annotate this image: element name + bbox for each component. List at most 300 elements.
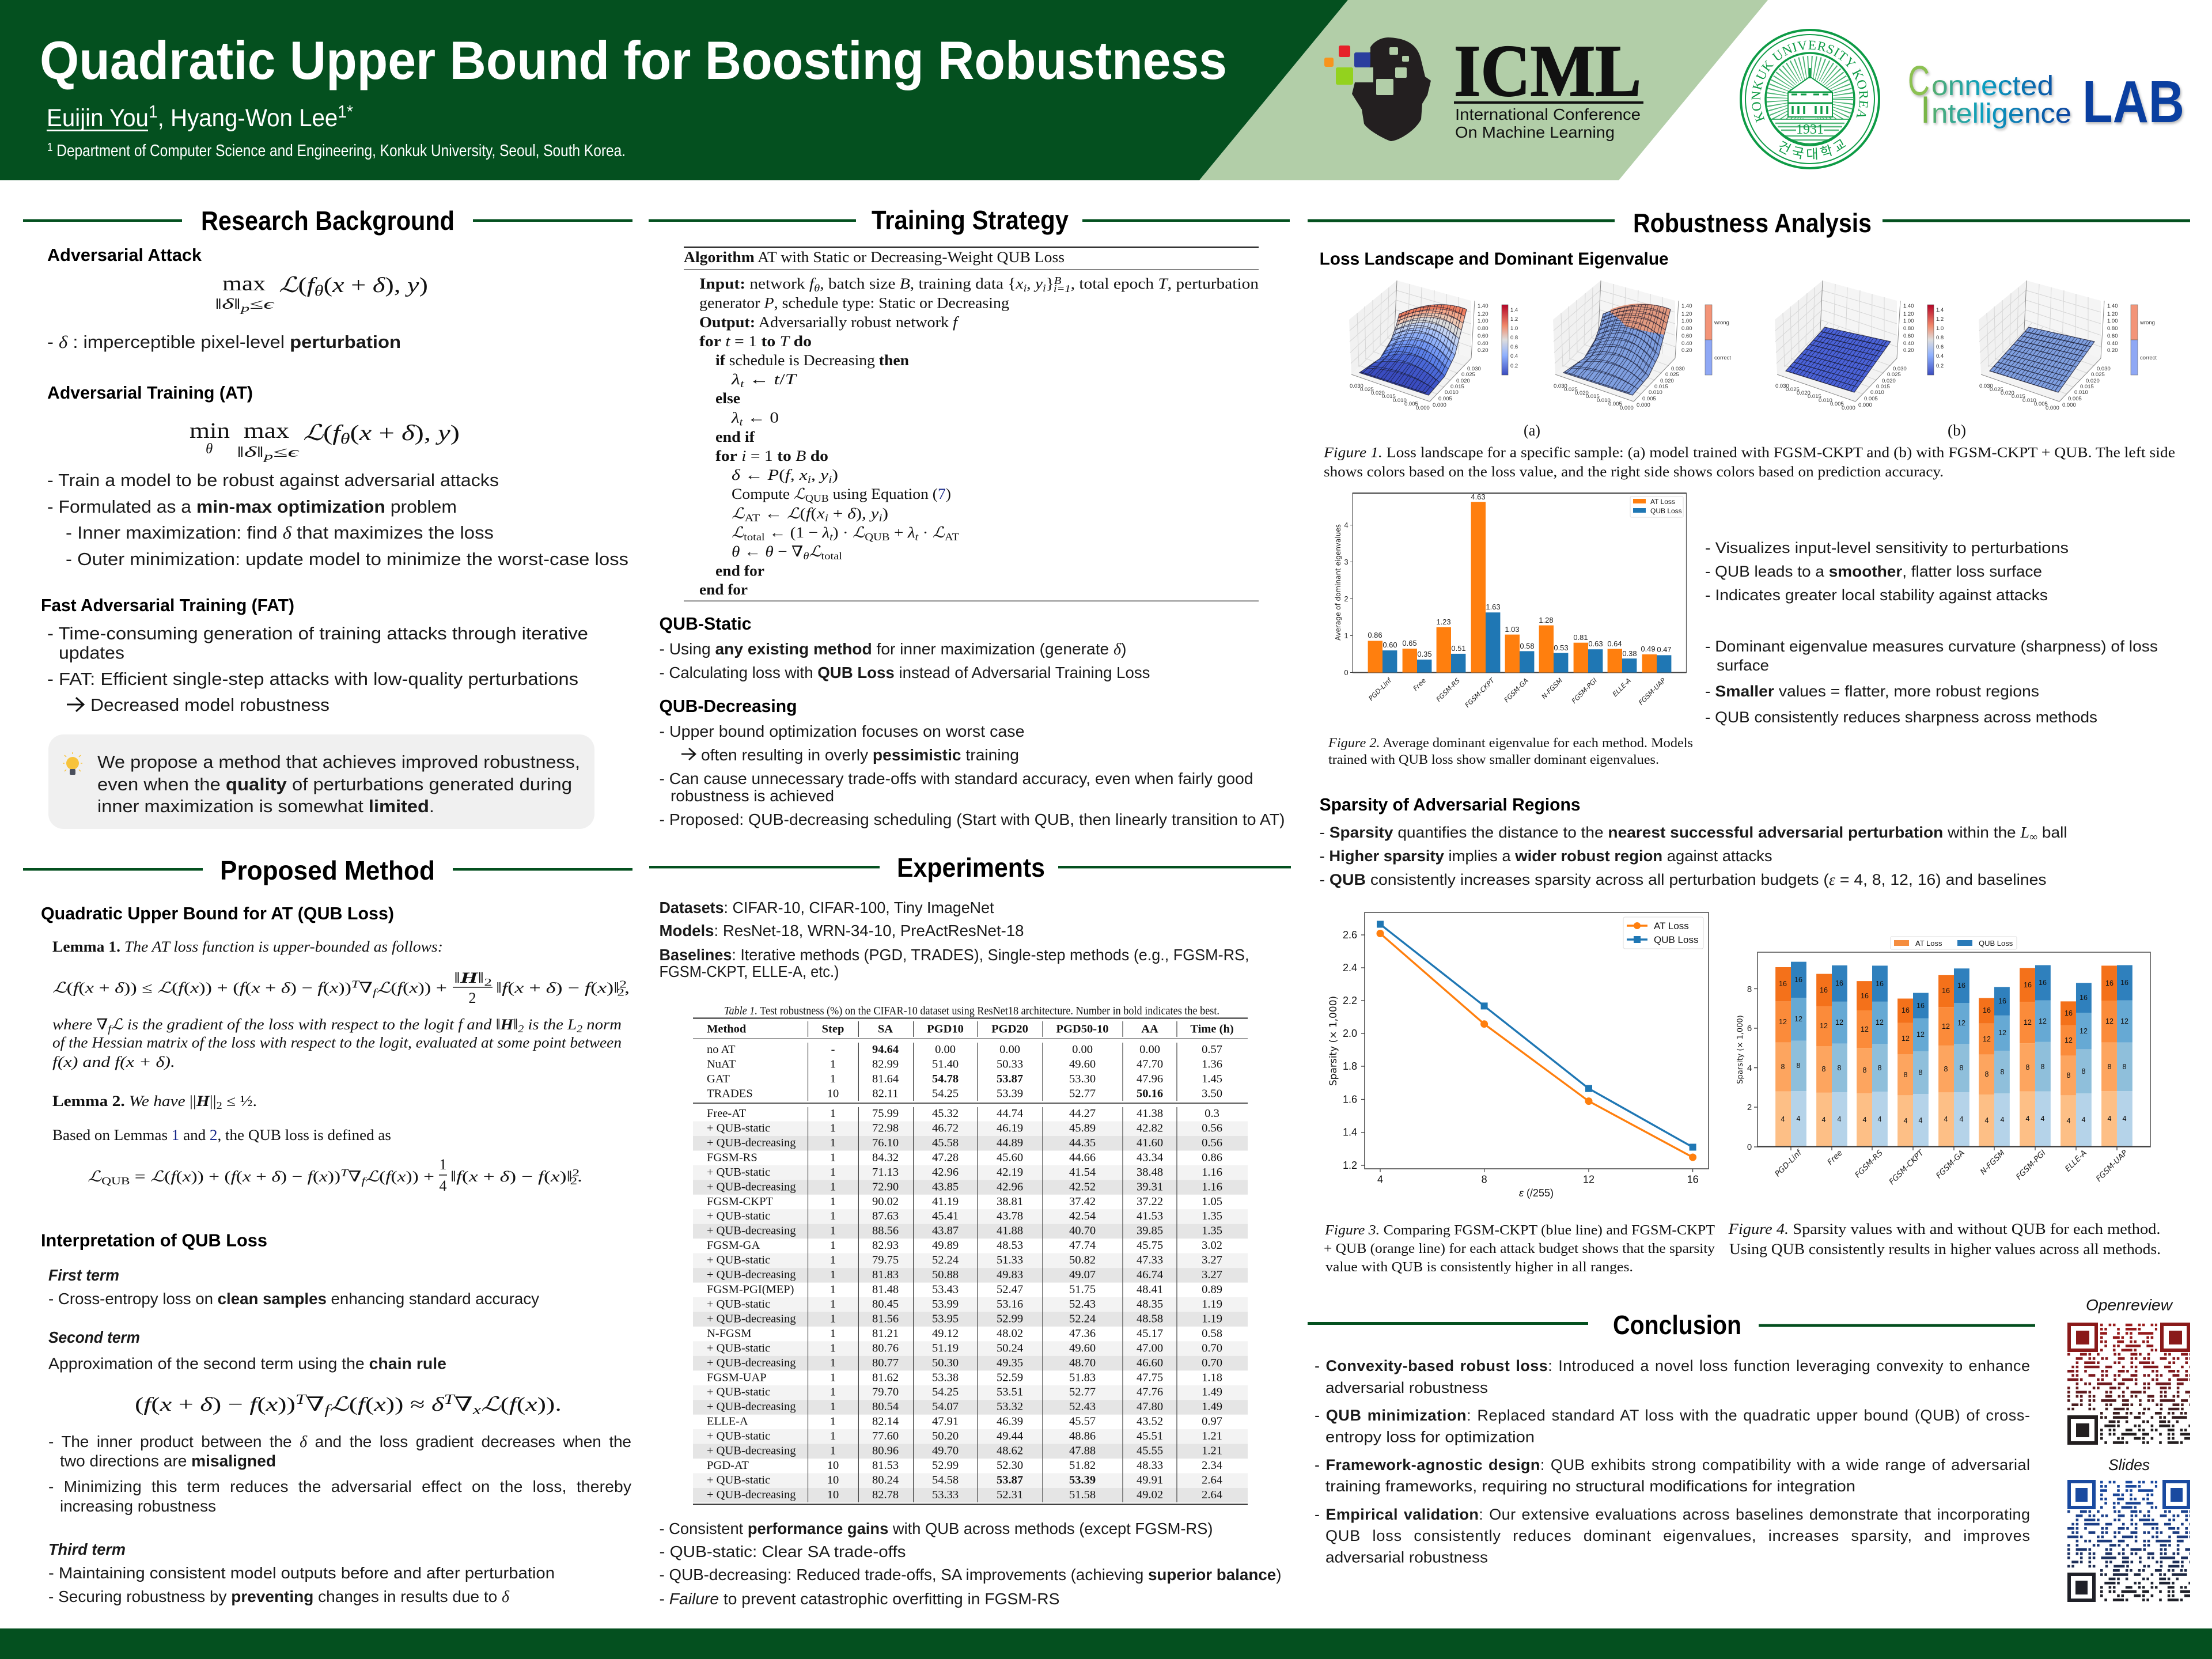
- table numeric values: [827, 1043, 1222, 1501]
- table numeric values: 42.54: [1069, 1210, 1096, 1222]
- algorithm box: ·: [918, 524, 933, 541]
- table method column: FGSM-PGI(MEP): [707, 1283, 794, 1296]
- table numeric values: 84.32: [872, 1151, 899, 1164]
- segment budget labels: 12: [1902, 1035, 1910, 1043]
- table numeric values: 0.00: [935, 1043, 956, 1056]
- table method column: + QUB-decreasing: [707, 1400, 796, 1413]
- algorithm box: }: [1046, 275, 1054, 292]
- chart: loss surface (b) coloured by loss: 0.010: [1870, 389, 1884, 396]
- chart: loss surface (b) coloured by accuracy: 0.005: [2034, 401, 2048, 407]
- table numeric values: 1: [830, 1357, 836, 1369]
- chart: loss surface (a) coloured by accuracy: 0.005: [1608, 401, 1622, 407]
- bar value labels: 0.47: [1657, 645, 1672, 654]
- algorithm box: +: [890, 524, 908, 541]
- table numeric values: 44.89: [997, 1137, 1023, 1149]
- table method column: + QUB-decreasing: [707, 1312, 796, 1325]
- chart: loss surface (a) coloured by accuracy: 0.020: [1575, 390, 1589, 396]
- table method column: + QUB-static: [707, 1386, 770, 1399]
- chart: loss surface (a) coloured by loss: 0.030: [1467, 366, 1481, 372]
- chart: loss surface (b) coloured by loss: 0.6: [1936, 344, 1944, 350]
- table numeric values: 77.60: [872, 1430, 899, 1442]
- text: FAT bullets: - FAT: Efficient single-step attacks with low-quality perturbations: [47, 669, 578, 689]
- table numeric values: 47.76: [1137, 1386, 1163, 1399]
- segment budget labels: 4: [1797, 1115, 1801, 1123]
- table numeric values: 0.86: [1202, 1151, 1222, 1164]
- bar value labels: 1.03: [1505, 625, 1520, 634]
- table numeric values: 0.89: [1202, 1283, 1222, 1296]
- text: third term: [48, 1540, 555, 1606]
- table numeric values: 50.24: [997, 1342, 1023, 1354]
- stacked chart axes: 0: [1747, 1142, 1752, 1152]
- panel: experiments: [649, 853, 1291, 1608]
- table numeric values: 1: [830, 1386, 836, 1399]
- line chart axis labels: 16: [1687, 1174, 1699, 1185]
- segment budget labels: 4: [2123, 1115, 2127, 1123]
- table numeric values: 47.33: [1137, 1254, 1163, 1267]
- table header row: PGD10: [927, 1023, 964, 1036]
- table numeric values: 0.70: [1202, 1342, 1222, 1354]
- header banner: [0, 0, 2184, 180]
- ICML logo: On Machine Learning: [1455, 123, 1615, 141]
- segment budget labels: 12: [1916, 1031, 1925, 1039]
- figure 4 caption: [1728, 1221, 2161, 1257]
- segment budget labels: 4: [1985, 1116, 1989, 1124]
- chart: loss surface (b) coloured by accuracy: 1.20: [2107, 311, 2118, 317]
- table numeric values: 37.42: [1069, 1195, 1096, 1208]
- text: first term: [48, 1266, 539, 1308]
- table numeric values: 40.70: [1069, 1225, 1096, 1237]
- chart: loss surface (a) coloured by loss: 0.005: [1438, 396, 1452, 402]
- segment budget labels: 16: [1902, 1006, 1910, 1014]
- formula: QUB loss definition: ℒ: [365, 1168, 380, 1185]
- stacked chart legend: AT Loss: [1915, 939, 1942, 948]
- table numeric values: 51.82: [1069, 1459, 1096, 1472]
- table numeric values: 48.02: [997, 1327, 1023, 1340]
- algorithm box: total: [744, 531, 765, 543]
- callout text: even when the quality of perturbations generated during: [97, 774, 572, 794]
- table numeric values: 49.07: [1069, 1268, 1096, 1281]
- callout text: We propose a method that achieves improved robustness,: [97, 752, 580, 772]
- text: second term: x: [472, 1403, 482, 1418]
- table method column: + QUB-static: [707, 1430, 770, 1442]
- table header row: Time (h): [1190, 1023, 1234, 1036]
- algorithm box: ←: [744, 371, 774, 388]
- table numeric values: 1: [830, 1371, 836, 1384]
- segment budget labels: 16: [1876, 980, 1884, 988]
- chart: loss surface (b) coloured by loss: 0.60: [1903, 333, 1914, 339]
- algorithm box: for t = 1 to T do: [699, 333, 812, 350]
- authors: 1: [149, 103, 158, 122]
- table numeric values: 51.75: [1069, 1283, 1096, 1296]
- line chart axis labels: 1.8: [1343, 1060, 1357, 1072]
- formula: min-max objective: ≤: [273, 445, 287, 460]
- table numeric values: 1: [830, 1122, 836, 1135]
- stacked chart legend: QUB Loss: [1979, 939, 2013, 948]
- chart: loss surface (a) coloured by loss: 0.010: [1393, 397, 1407, 404]
- table numeric values: 48.58: [1137, 1312, 1163, 1325]
- text: third term: - Maintaining consistent model outputs before and after perturbation: [48, 1564, 555, 1582]
- table numeric values: 45.55: [1137, 1445, 1163, 1457]
- text: experiment setup: [659, 899, 1249, 980]
- algorithm box: 7): [938, 486, 950, 502]
- chart: loss surface (b) coloured by accuracy: 0.40: [2107, 340, 2118, 347]
- table numeric values: 1: [830, 1445, 836, 1457]
- Connected Intelligence LAB logo: [1908, 58, 2184, 135]
- text: adversarial training bullets: - Formulated as a min-max optimization problem: [47, 497, 457, 517]
- algorithm box: if schedule is Decreasing then: [715, 352, 910, 369]
- chart: loss surface (b) coloured by accuracy: [1979, 281, 2157, 411]
- algorithm box: λ: [907, 524, 915, 541]
- table numeric values: 41.54: [1069, 1166, 1096, 1179]
- formula: QUB loss definition: ℒ: [88, 1168, 103, 1185]
- table method column: + QUB-decreasing: [707, 1137, 796, 1149]
- table numeric values: 1.49: [1202, 1386, 1222, 1399]
- formula: attack maximization: ≤: [249, 297, 263, 312]
- figure 4 caption: Figure 4. Sparsity values with and without QUB for each method.: [1728, 1221, 2160, 1237]
- table numeric values: 44.66: [1069, 1151, 1096, 1164]
- algorithm box: ): [832, 467, 838, 483]
- algorithm box: λ: [731, 409, 740, 426]
- formula: QUB loss definition: 1: [439, 1156, 447, 1173]
- algorithm box: i: [1043, 282, 1046, 294]
- lemma 1: ℒ(f(x + δ)) ≤ ℒ(f(x)) + ( f(x + δ) − f(x)): [52, 979, 349, 997]
- heading: research background: Research Background: [201, 206, 454, 236]
- table numeric values: 54.25: [932, 1386, 959, 1399]
- text: second term: ℒ: [329, 1394, 350, 1415]
- chart: loss surface (b) coloured by accuracy: 0.010: [2074, 389, 2088, 396]
- y axis ticks and label: 4: [1344, 521, 1349, 529]
- segment budget labels: 16: [2120, 979, 2128, 987]
- table numeric values: 1: [830, 1327, 836, 1340]
- stacked chart axes: Free: [1825, 1149, 1844, 1167]
- algorithm box: ℒ: [732, 524, 745, 541]
- table numeric values: 42.96: [932, 1166, 959, 1179]
- table numeric values: 1: [830, 1298, 836, 1310]
- QR code: Openreview: Openreview: [2086, 1297, 2173, 1314]
- lemma 1: L: [567, 1016, 576, 1033]
- table numeric values: 1: [830, 1312, 836, 1325]
- segment budget labels: 16: [2024, 981, 2032, 989]
- formula: QUB loss definition: 4: [439, 1177, 447, 1194]
- algorithm box: Compute ℒ: [732, 486, 805, 502]
- segment budget labels: 8: [1904, 1071, 1908, 1079]
- chart: loss surface (a) coloured by accuracy: 1.20: [1681, 311, 1692, 317]
- text: landscape findings: [1705, 539, 2069, 604]
- segment budget labels: 16: [2080, 994, 2088, 1002]
- text: FAT bullets: Decreased model robustness: [90, 695, 329, 715]
- algorithm box: +: [828, 505, 847, 522]
- chart: loss surface (b) coloured by accuracy: 0.20: [2107, 347, 2118, 354]
- table: robustness results: [693, 1017, 1248, 1505]
- chart: loss surface (a) coloured by loss: 0.025: [1461, 372, 1475, 378]
- bar value labels: 1.63: [1486, 603, 1501, 611]
- footer band: [0, 1628, 2212, 1659]
- table numeric values: 53.33: [932, 1488, 959, 1501]
- chart: loss surface (b) coloured by accuracy: 0.000: [2062, 402, 2076, 408]
- table numeric values: 51.33: [997, 1254, 1023, 1267]
- stacked chart axes: PGD-Linf: [1773, 1147, 1804, 1179]
- chart: sparsity by attack budget: [1328, 912, 1709, 1199]
- table header row: PGD20: [991, 1023, 1028, 1036]
- bar value labels: 0.64: [1607, 639, 1622, 648]
- algorithm box: t/T: [774, 371, 793, 388]
- segment budget labels: 8: [2123, 1063, 2127, 1071]
- table numeric values: 39.31: [1137, 1180, 1163, 1193]
- table numeric values: 46.74: [1137, 1268, 1163, 1281]
- algorithm box: ← (1 −: [765, 524, 822, 541]
- algorithm box: for i = 1 to B do: [715, 448, 828, 464]
- algorithm box: end for: [699, 581, 748, 598]
- segment budget labels: 16: [1916, 1002, 1925, 1010]
- line chart axis labels: 8: [1482, 1174, 1487, 1185]
- icon: head silhouette: [1352, 37, 1431, 141]
- chart: loss surface (b) coloured by accuracy: 0.010: [2022, 397, 2036, 404]
- table numeric values: 50.33: [997, 1058, 1023, 1070]
- formula: attack maximization: x + δ), y): [332, 274, 426, 297]
- chart: loss surface (b) coloured by loss: 0.025: [1887, 372, 1901, 378]
- table numeric values: 72.98: [872, 1122, 899, 1135]
- segment budget labels: 8: [2041, 1063, 2045, 1071]
- callout text: inner maximization is somewhat limited.: [97, 796, 434, 816]
- y axis ticks and label: 3: [1344, 558, 1349, 566]
- table numeric values: 49.02: [1137, 1488, 1163, 1501]
- chart: loss surface (a) coloured by loss: 1.0: [1510, 325, 1518, 332]
- table numeric values: 76.10: [872, 1137, 899, 1149]
- text: second term: - The inner product between the δ and the loss gradient decreases when the: [48, 1433, 631, 1451]
- table numeric values: 2.64: [1202, 1488, 1222, 1501]
- seal building: [1788, 68, 1832, 117]
- QR code: Slides: [2067, 1456, 2190, 1600]
- table numeric values: 80.54: [872, 1400, 899, 1413]
- chart: loss surface (a) coloured by accuracy: 0.015: [1654, 384, 1668, 390]
- figure 1 caption: [1323, 445, 2175, 480]
- table numeric values: 53.87: [997, 1474, 1023, 1486]
- segment budget labels: 8: [1822, 1065, 1826, 1073]
- table numeric values: 49.83: [997, 1268, 1023, 1281]
- formula: min-max objective: x + δ), y): [359, 421, 457, 445]
- table numeric values: 48.70: [1069, 1357, 1096, 1369]
- table method column: FGSM-GA: [707, 1239, 760, 1252]
- table numeric values: 54.25: [932, 1088, 959, 1100]
- table numeric values: 53.32: [997, 1400, 1023, 1413]
- table numeric values: 43.78: [997, 1210, 1023, 1222]
- segment budget labels: 4: [1838, 1115, 1842, 1123]
- segment budget labels: 16: [1820, 986, 1828, 994]
- segment budget labels: 16: [1794, 976, 1802, 984]
- table numeric values: 47.80: [1137, 1400, 1163, 1413]
- chart: loss surface (b) coloured by loss: 1.4: [1936, 307, 1944, 313]
- table numeric values: 80.45: [872, 1298, 899, 1310]
- chart: loss surface (a) coloured by loss: 0.000: [1433, 402, 1446, 408]
- lemma 1: [52, 938, 630, 1070]
- subheading: QUB-decreasing: QUB-Decreasing: [659, 696, 797, 716]
- segment budget labels: 8: [1781, 1063, 1785, 1071]
- subheading: QUB-static: QUB-Static: [659, 613, 751, 634]
- table numeric values: 41.53: [1137, 1210, 1163, 1222]
- chart: loss surface (b) coloured by loss: 1.40: [1903, 303, 1914, 309]
- algorithm box: ℒ: [732, 505, 745, 522]
- bar value labels: 1.28: [1539, 616, 1554, 624]
- table numeric values: 54.07: [932, 1400, 959, 1413]
- text: first term: - Cross-entropy loss on clean samples enhancing standard accuracy: [48, 1290, 539, 1308]
- text: QUB-decreasing bullets: often resulting in overly pessimistic training: [701, 746, 1019, 764]
- chart: loss surface (b) coloured by loss: 0.2: [1936, 363, 1944, 369]
- chart: loss surface (a) coloured by loss: 0.80: [1478, 325, 1488, 332]
- chart: loss surface (b) coloured by loss: 0.015: [1876, 384, 1890, 390]
- segment budget labels: 4: [2026, 1115, 2030, 1123]
- table numeric values: 52.59: [997, 1371, 1023, 1384]
- legend: [1630, 497, 1683, 517]
- text: sparsity bullets: - Sparsity quantifies the distance to the nearest successful adversarial perturbation within the L: [1320, 824, 2029, 841]
- formula: attack maximization: [215, 272, 428, 314]
- table header row: Method: [707, 1023, 747, 1036]
- text: experiment setup: Baselines: Iterative methods (PGD, TRADES), Single-step methods (e.g., FGSM-RS,: [659, 946, 1249, 964]
- table numeric values: 53.87: [997, 1073, 1023, 1085]
- table numeric values: 50.16: [1137, 1088, 1163, 1100]
- subheading: QUB loss: Quadratic Upper Bound for AT (QUB Loss): [41, 903, 394, 923]
- algorithm box: t: [740, 378, 745, 389]
- table numeric values: 52.43: [1069, 1400, 1096, 1413]
- formula: QUB loss definition: QUB: [101, 1175, 130, 1187]
- segment budget labels: 4: [1781, 1115, 1785, 1123]
- algorithm box: θ: [803, 550, 809, 562]
- sub-figure labels: [1524, 422, 1966, 439]
- table numeric values: 82.78: [872, 1488, 899, 1501]
- formula: QUB loss definition: ∇: [348, 1168, 362, 1185]
- table numeric values: 1: [830, 1137, 836, 1149]
- table header row: AA: [1141, 1023, 1158, 1036]
- table numeric values: 44.74: [997, 1107, 1023, 1120]
- seal lettering: KONKUK UNIVERSITY KOREA: [1751, 40, 1869, 123]
- lemma 2: Lemma 2. We have ||H||: [52, 1093, 215, 1109]
- chart: loss surface (a) coloured by accuracy: 1.00: [1681, 318, 1692, 324]
- conference name: International Conference: [1455, 105, 1641, 123]
- Connected Intelligence LAB logo: I: [1921, 88, 1930, 131]
- table numeric values: 45.17: [1137, 1327, 1163, 1340]
- stacked chart axes: N-FGSM: [1979, 1148, 2007, 1177]
- algorithm box: ): [882, 505, 888, 522]
- segment budget labels: 12: [1779, 1018, 1787, 1026]
- table numeric values: 52.24: [932, 1254, 959, 1267]
- chart: loss surface (a) coloured by accuracy: 0.010: [1597, 397, 1611, 404]
- text: second term: Second term: [48, 1328, 140, 1346]
- table method column: + QUB-static: [707, 1298, 770, 1310]
- segment budget labels: 8: [1838, 1064, 1842, 1072]
- algorithm box: ,: [1027, 275, 1035, 292]
- table numeric values: 81.83: [872, 1268, 899, 1281]
- text: adversarial training bullets: - Inner maximization: find δ that maximizes the loss: [66, 522, 494, 543]
- table numeric values: 0.56: [1202, 1137, 1222, 1149]
- bar value labels: 1.23: [1436, 618, 1451, 626]
- formula: QUB loss definition: =: [130, 1168, 150, 1185]
- table numeric values: 79.70: [872, 1386, 899, 1399]
- table numeric values: 0.00: [999, 1043, 1020, 1056]
- table numeric values: 1.05: [1202, 1195, 1222, 1208]
- text: third term: Third term: [48, 1540, 126, 1558]
- segment budget labels: 8: [2026, 1063, 2030, 1071]
- table numeric values: 1.19: [1202, 1298, 1222, 1310]
- heading: robustness analysis: Robustness Analysis: [1633, 208, 1872, 238]
- line chart axis labels: 12: [1583, 1174, 1594, 1185]
- chart: loss surface (a) coloured by accuracy: 0.015: [1586, 393, 1600, 400]
- x axis labels: FGSM-CKPT: [1463, 676, 1497, 709]
- algorithm box: θ: [814, 282, 820, 294]
- table method column: + QUB-static: [707, 1122, 770, 1135]
- text: second term: (f(x)) ≈ δ: [349, 1394, 441, 1415]
- chart: loss surface (a) coloured by accuracy: 0.000: [1620, 405, 1634, 411]
- table header row: Step: [822, 1023, 844, 1036]
- chart: loss surface (a) coloured by loss: 0.030: [1350, 383, 1363, 389]
- figure 1 caption: shows colors based on the loss value, and the right side shows colors based on prediction accuracy.: [1324, 464, 1944, 480]
- chart: loss surface (b) coloured by loss: 0.030: [1893, 366, 1907, 372]
- bar value labels: 0.58: [1520, 642, 1535, 650]
- lemma 1: ∇: [359, 979, 373, 997]
- chart: loss surface (b) coloured by accuracy: 0.025: [1990, 387, 2003, 393]
- stacked chart axes: FGSM-GA: [1934, 1149, 1967, 1180]
- formula: QUB loss definition: 2: [573, 1167, 579, 1179]
- formula: min-max objective: ‖δ ‖: [237, 445, 260, 460]
- chart: loss surface (a) coloured by accuracy: 0.020: [1660, 378, 1674, 384]
- algorithm box: t: [830, 531, 834, 543]
- table numeric values: 49.60: [1069, 1342, 1096, 1354]
- table numeric values: 1.35: [1202, 1210, 1222, 1222]
- algorithm box: Algorithm AT with Static or Decreasing-Weight QUB Loss: [684, 249, 1065, 266]
- segment budget labels: 8: [1863, 1066, 1867, 1074]
- segment budget labels: 12: [2080, 1027, 2088, 1035]
- text: second term: ∇: [306, 1394, 324, 1415]
- chart: loss surface (a) coloured by loss: 0.015: [1382, 393, 1396, 400]
- table numeric values: 72.90: [872, 1180, 899, 1193]
- line chart axis labels: [1328, 929, 1699, 1199]
- table numeric values: 53.38: [932, 1371, 959, 1384]
- table numeric values: 51.58: [1069, 1488, 1096, 1501]
- text: conclusion bullets: adversarial robustness: [1325, 1379, 1488, 1396]
- QR code: Openreview: [2067, 1297, 2190, 1443]
- chart: loss surface (a) coloured by accuracy: 0.20: [1681, 347, 1692, 354]
- table numeric values: 0.57: [1202, 1043, 1222, 1056]
- segment budget labels: 8: [1985, 1070, 1989, 1078]
- text: second term: Approximation of the second term using the chain rule: [48, 1355, 446, 1372]
- table numeric values: 0.00: [1139, 1043, 1160, 1056]
- table numeric values: 53.43: [932, 1283, 959, 1296]
- formula: attack maximization: p: [238, 302, 250, 314]
- chart: loss surface (b) coloured by loss: 0.030: [1775, 383, 1789, 389]
- chart: loss surface (b) coloured by loss: 0.40: [1903, 340, 1914, 347]
- table method column: PGD-AT: [707, 1459, 749, 1472]
- table numeric values: 3.27: [1202, 1268, 1222, 1281]
- algorithm box: y: [1033, 275, 1043, 292]
- table header row: SA: [878, 1023, 893, 1036]
- heading: experiments: Experiments: [897, 853, 1045, 882]
- table numeric values: 47.91: [932, 1415, 959, 1428]
- table numeric values: 51.19: [932, 1342, 959, 1354]
- algorithm box: i: [1024, 282, 1027, 294]
- x axis labels: FGSM-UAP: [1637, 676, 1667, 707]
- table numeric values: 88.56: [872, 1225, 899, 1237]
- formula: attack maximization: (: [324, 274, 332, 297]
- line chart legend: [1623, 917, 1703, 949]
- text: FAT bullets: updates: [59, 643, 124, 662]
- table numeric values: 1: [830, 1268, 836, 1281]
- Konkuk University seal: 1931: [1796, 122, 1824, 137]
- table numeric values: 39.85: [1137, 1225, 1163, 1237]
- segment budget labels: 12: [1820, 1022, 1828, 1030]
- chart: loss surface (a) coloured by accuracy: [1553, 281, 1731, 411]
- algorithm box: i=1: [1054, 283, 1071, 294]
- table numeric values: 1.21: [1202, 1445, 1222, 1457]
- table numeric values: 1: [830, 1210, 836, 1222]
- table numeric values: 45.41: [932, 1210, 959, 1222]
